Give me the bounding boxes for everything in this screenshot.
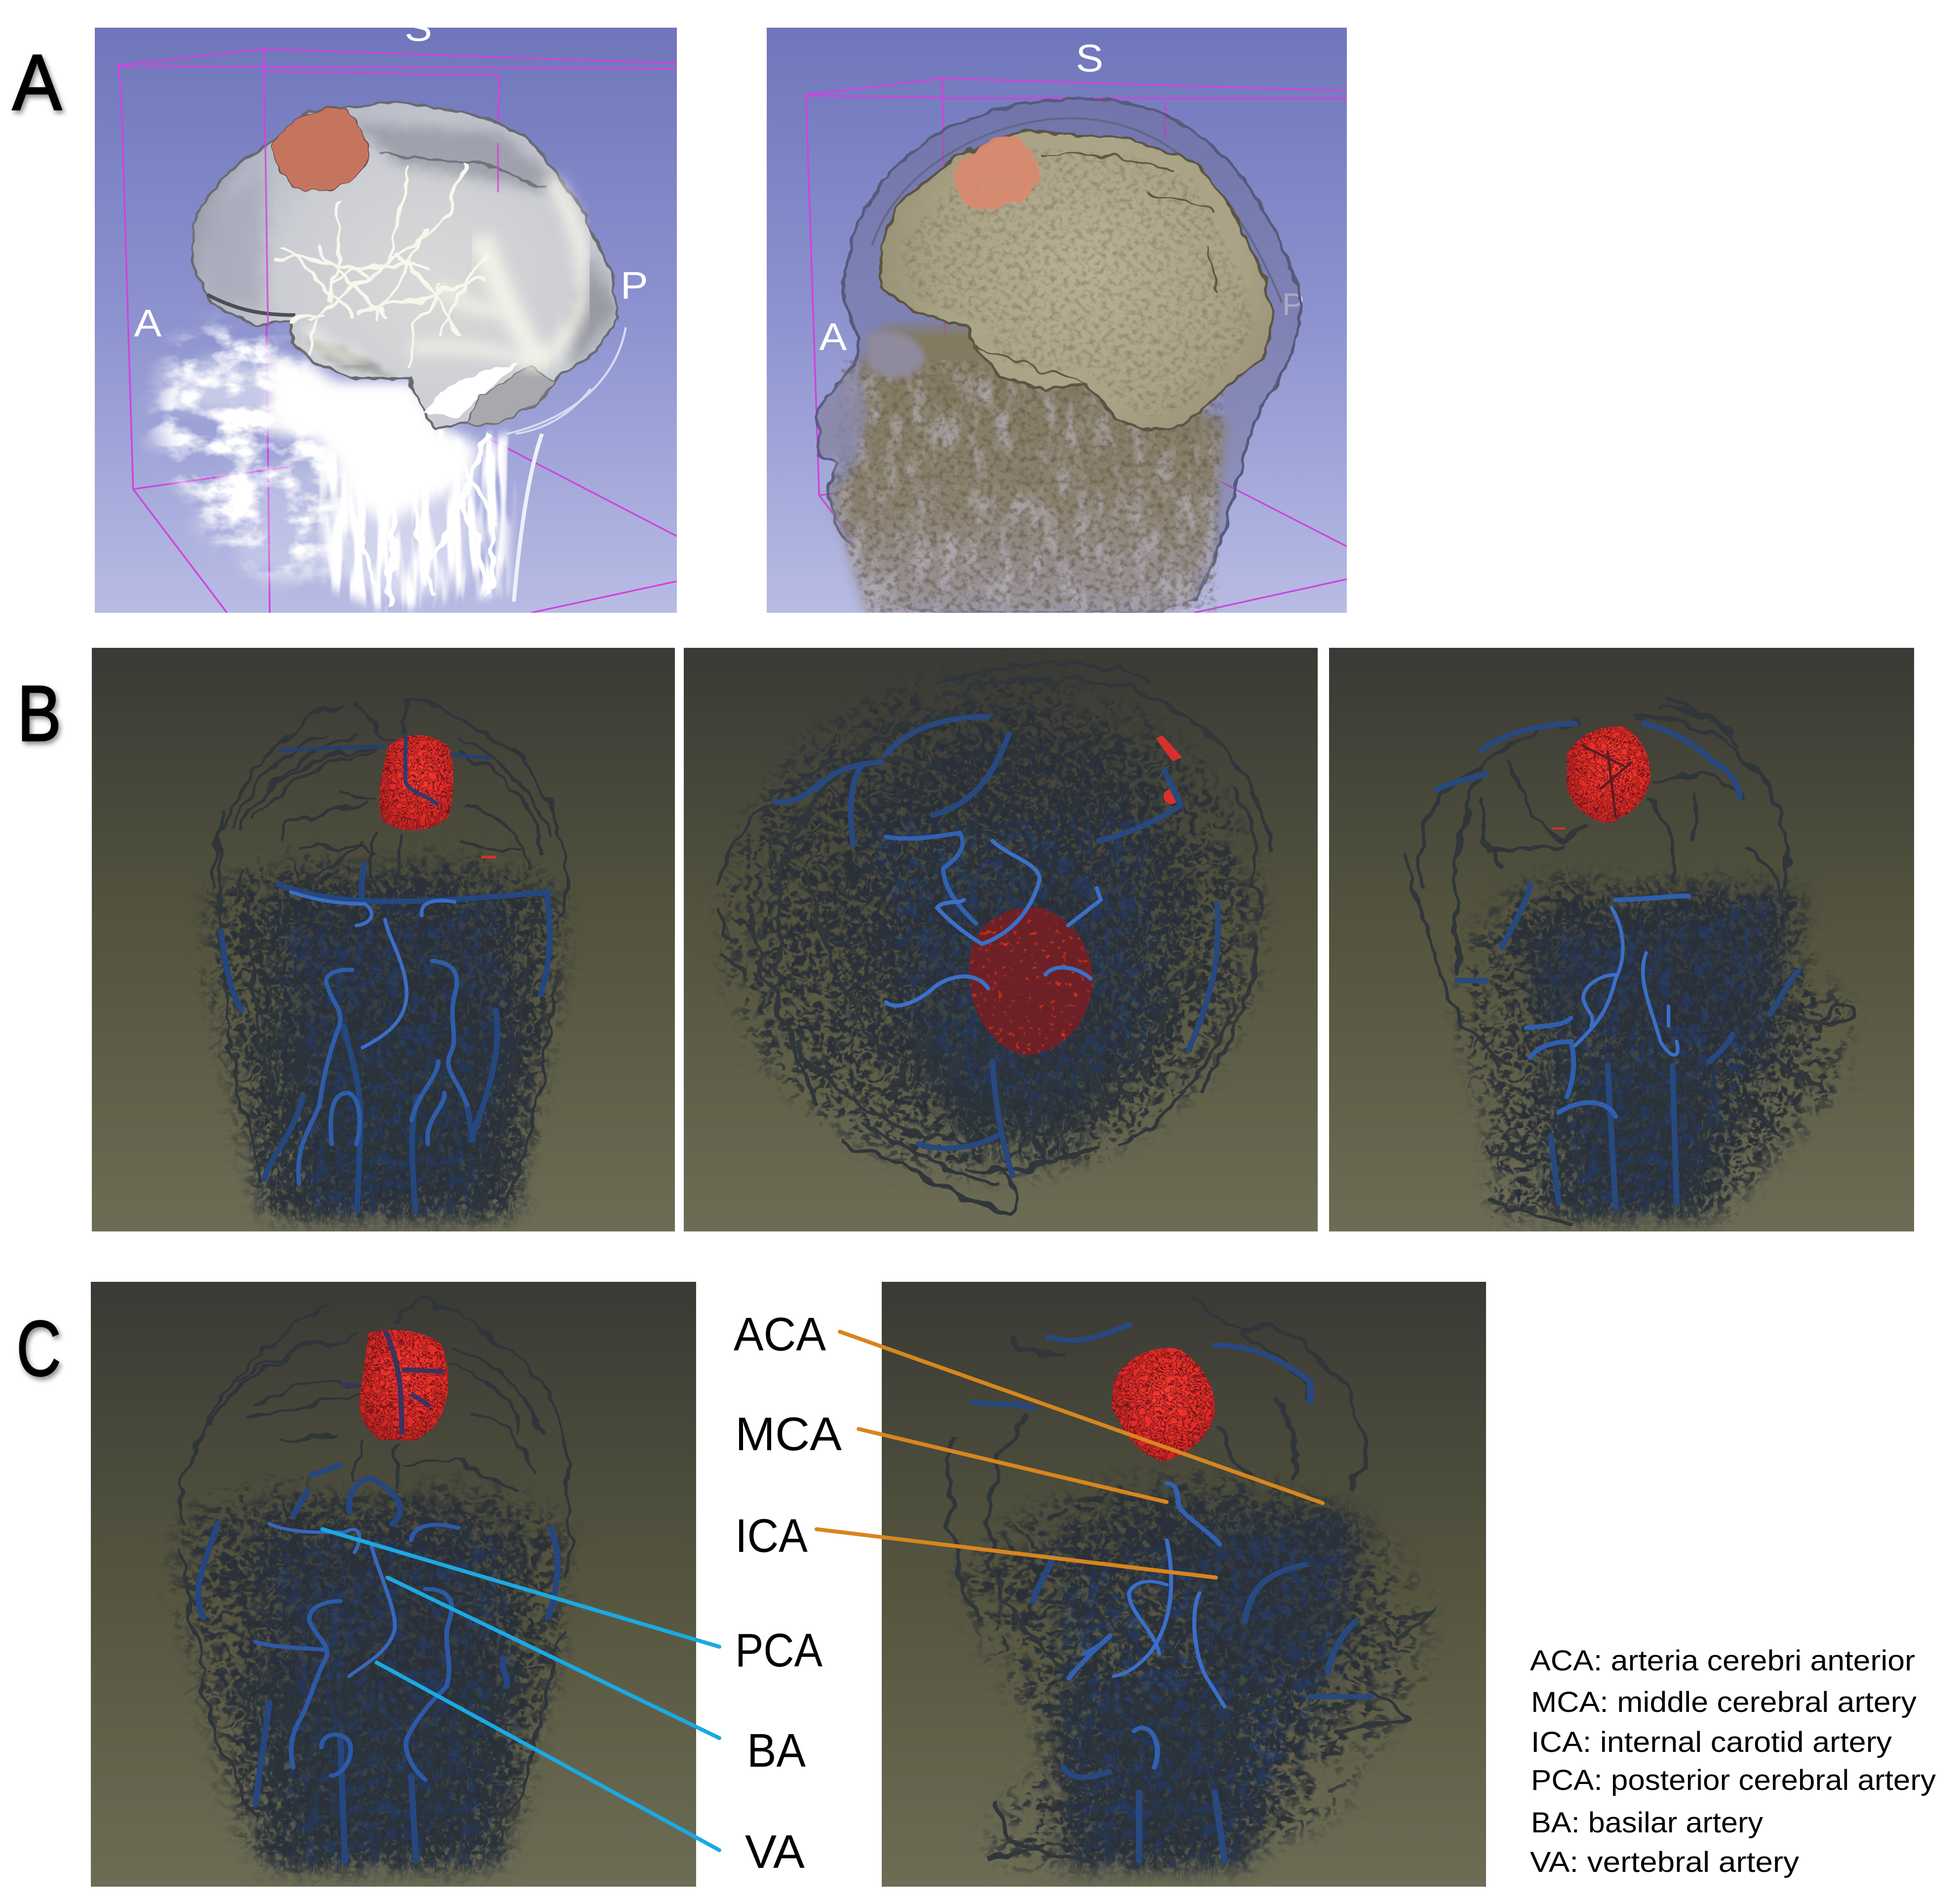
blue arteries (198, 1465, 557, 1861)
white neck vessels (271, 327, 626, 613)
blue vessel mesh (869, 805, 1152, 1120)
outer vessel arcs (718, 665, 1271, 1211)
panel A left: brain with vessels and tumor (95, 6, 677, 613)
tumor (1111, 1348, 1215, 1462)
orientation letters: P (1282, 287, 1304, 322)
abbreviation legend: VA: vertebral artery (1530, 1846, 1799, 1878)
blue vessel mesh (1542, 900, 1770, 1211)
orientation letters (134, 6, 648, 345)
orientation letters: A (819, 316, 847, 358)
brain (881, 131, 1273, 432)
panel C1: labelled frontal vessel view (91, 1282, 696, 1887)
panel label C: C (16, 1304, 61, 1392)
tumor (273, 108, 368, 191)
abbreviation legend: ICA: internal carotid artery (1531, 1726, 1892, 1758)
red fragment (481, 856, 496, 859)
tumor (969, 907, 1093, 1055)
panel B1: frontal vessel view (92, 648, 675, 1231)
white face vessels cloud (154, 329, 353, 581)
abbreviation legend: BA: basilar artery (1531, 1807, 1763, 1839)
blue vessel mesh (1063, 1524, 1345, 1861)
panel label B: B (17, 669, 61, 757)
bounding box lines (118, 49, 677, 613)
white intracranial vessels (273, 163, 583, 368)
blue arteries (221, 865, 549, 1211)
skull vessels (950, 1301, 1431, 1861)
orientation letters (819, 37, 1304, 358)
artery labels: MCA (735, 1408, 842, 1461)
blue arteries (776, 717, 1218, 1176)
dark vessel mesh (722, 672, 1262, 1176)
tumor (340, 1330, 448, 1441)
bounding box lines (806, 79, 1347, 613)
dark underlay (295, 908, 508, 1203)
panel A right: translucent head with brain and tumor (767, 28, 1347, 613)
tumor (1567, 726, 1650, 823)
artery labels (734, 1308, 842, 1878)
abbreviation legend: PCA: posterior cerebral artery (1531, 1764, 1936, 1796)
red fragments (1156, 735, 1182, 804)
orientation letters: P (621, 265, 648, 307)
artery labels: ICA (735, 1509, 808, 1562)
orientation letters: A (134, 302, 161, 345)
blue arteries (973, 1325, 1371, 1861)
annotation lines: anterior circulation (817, 1332, 1323, 1578)
skull vessels (211, 697, 565, 1211)
orientation letters: S (1076, 37, 1103, 80)
dark vessel mesh (963, 1474, 1424, 1869)
brain surface (192, 101, 617, 429)
artery labels: VA (745, 1825, 805, 1878)
skull vessels (1404, 699, 1852, 1227)
skull vessels (180, 1301, 570, 1849)
red fragment (1552, 828, 1565, 830)
annotation lines: posterior circulation (322, 1529, 719, 1850)
orientation letters: S (404, 6, 432, 49)
abbreviation legend (1530, 1645, 1936, 1878)
artery labels: BA (747, 1724, 806, 1777)
dark underlay (1089, 1524, 1345, 1853)
tumor (953, 136, 1038, 211)
blue vessel mesh (287, 908, 504, 1211)
artery labels: PCA (735, 1624, 823, 1677)
tumor (278, 734, 491, 831)
blue arteries (1437, 723, 1799, 1207)
dark vessel mesh (1457, 872, 1851, 1219)
lines seen through brain (265, 141, 498, 327)
artery labels: ACA (734, 1308, 826, 1361)
panel label A: A (12, 38, 62, 126)
dark underlay (1534, 900, 1778, 1203)
panel B3: lateral vessel view (1329, 648, 1914, 1231)
dark vessel mesh (205, 855, 565, 1219)
head skin (817, 98, 1298, 613)
dark underlay (274, 1548, 501, 1849)
dark vessel mesh (175, 1482, 567, 1869)
abbreviation legend: ACA: arteria cerebri anterior (1530, 1645, 1915, 1677)
dark underlay (910, 869, 1144, 1128)
abbreviation legend: MCA: middle cerebral artery (1531, 1686, 1917, 1718)
blue vessel mesh (274, 1540, 510, 1861)
panel B2: top-down vessel view (684, 648, 1318, 1231)
panel C2: labelled oblique vessel view (882, 1282, 1486, 1887)
